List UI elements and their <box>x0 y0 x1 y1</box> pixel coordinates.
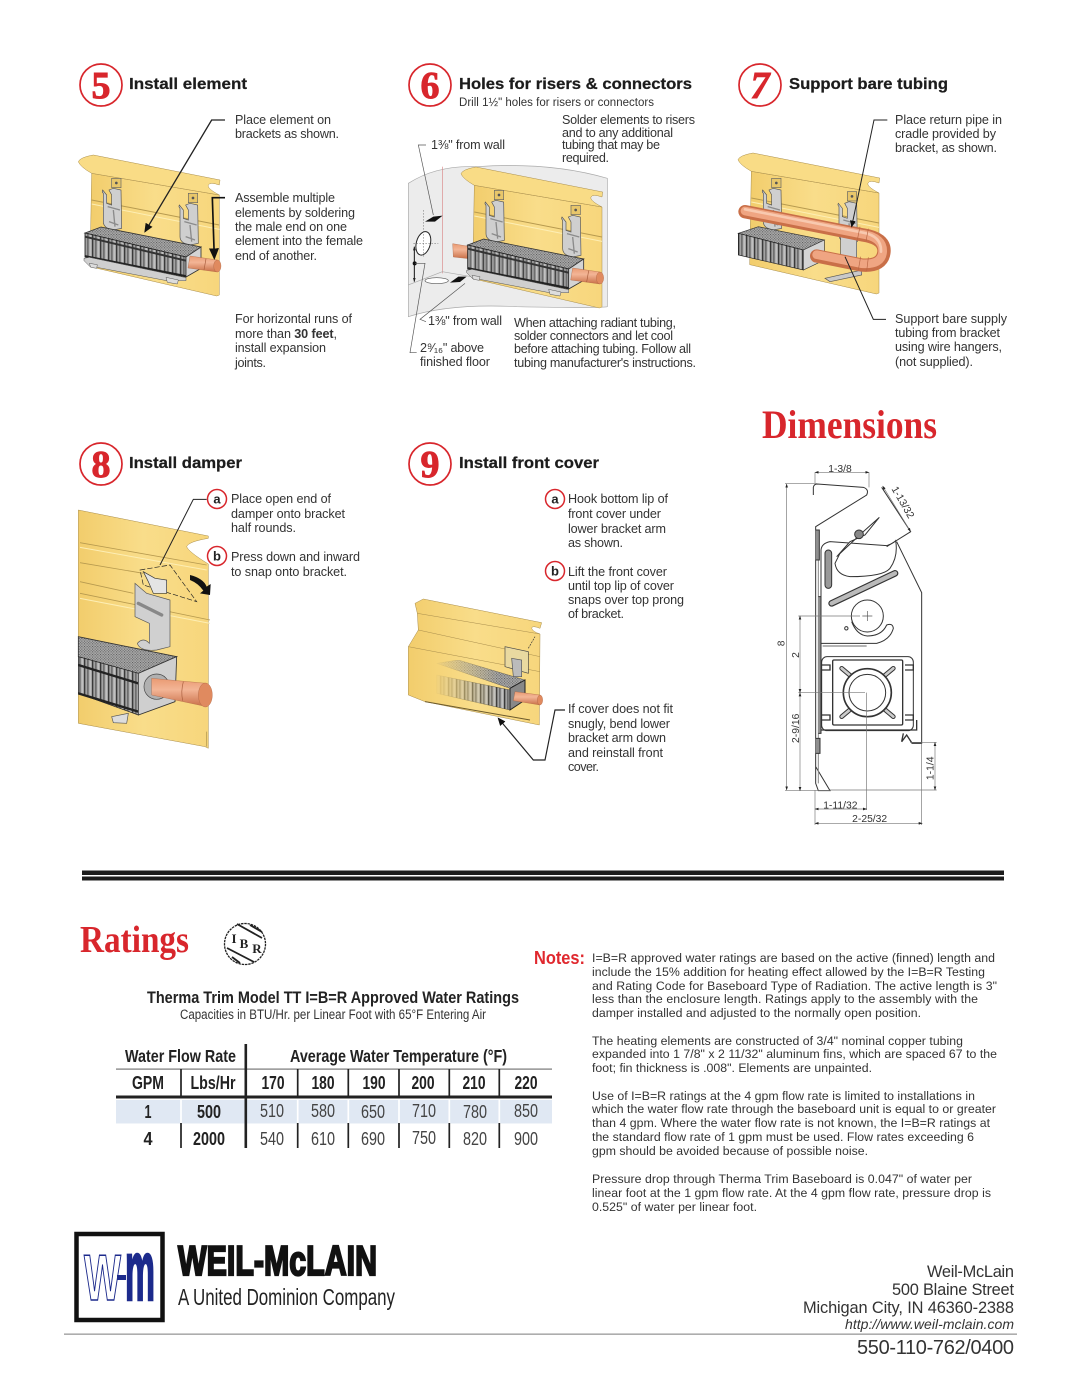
text: return pipe <box>895 113 1002 155</box>
heading: notes: Notes: <box>534 948 585 968</box>
text: address: Michigan City, IN 46360-2388 <box>803 1299 1014 1317</box>
text: notes paragraph 1: damper installed and adjusted to the normally open position. <box>592 1006 921 1020</box>
text: horizontal runs: more than 30 feet, <box>235 327 337 341</box>
text: if cover does not fit: snugly, bend lower <box>568 717 670 731</box>
text: horizontal runs: For horizontal runs of <box>235 312 352 326</box>
heading: install damper: Install damper <box>129 455 242 472</box>
text: press down <box>231 550 360 579</box>
dimension labels: 1-3/8 <box>828 464 852 475</box>
text: lift front cover <box>568 565 684 621</box>
text: notes paragraph 1: less than the enclosure length. Ratings apply to the assembly with the <box>592 992 978 1006</box>
text: supply tubing: (not supplied). <box>895 355 973 369</box>
dimension labels: 2-9/16 <box>791 713 802 743</box>
callout: b <box>546 562 564 580</box>
heading: holes for risers: Holes for risers & connectors <box>459 76 692 93</box>
text: notes paragraph 3: gpm should be avoided because of possible noise. <box>592 1144 868 1158</box>
text: notes paragraph 2: expanded into 1 7/8" x 2 11/32" aluminum fins, which are spaced 67 to the <box>592 1047 997 1061</box>
text: lift front cover: until top lip of cover <box>568 579 674 593</box>
badge: number 9: 9 <box>420 444 440 486</box>
text: lift front cover: snaps over top prong <box>568 593 684 607</box>
text: assemble elements <box>235 191 363 263</box>
badge: number 5 <box>80 64 122 107</box>
text: m <box>125 1224 155 1319</box>
label: from wall lower: 1⅜" from wall <box>428 314 502 328</box>
table: water ratings: 540 <box>260 1129 284 1149</box>
text: notes paragraph 1: include the 15% addition for heating effect allowed by the I=B=R Testing <box>592 965 985 979</box>
text: supply tubing: Support bare supply <box>895 312 1008 326</box>
illustration: front cover <box>408 599 565 760</box>
label: above finished floor: finished floor <box>420 355 490 369</box>
text: if cover does not fit: If cover does not fit <box>568 702 674 716</box>
table: water ratings: 820 <box>463 1129 487 1149</box>
badge: number 8: 8 <box>92 444 110 486</box>
text: place open end: damper onto bracket <box>231 507 346 521</box>
table: water ratings: 750 <box>412 1128 436 1148</box>
text: return pipe: cradle provided by <box>895 127 997 141</box>
badge: number 6: 6 <box>420 65 440 107</box>
panel: step 6 holes for risers and connectors <box>408 64 696 370</box>
callout: a: a <box>213 492 221 506</box>
divider: double rule <box>82 870 1004 880</box>
text: solder elements: required. <box>562 151 609 165</box>
table: water ratings: 610 <box>311 1129 335 1149</box>
table: water ratings: Water Flow Rate <box>125 1046 236 1066</box>
table: water ratings: 210 <box>462 1073 486 1093</box>
dimension labels: 1-1/4 <box>926 756 937 780</box>
table: water ratings: 510 <box>260 1101 284 1121</box>
text: solder elements: tubing that may be <box>562 138 660 152</box>
label: above finished floor: 2⁹⁄₁₆" above <box>420 341 484 355</box>
text: notes paragraph 4: 0.525" of water per linear foot. <box>592 1200 757 1214</box>
panel: step 8 install damper <box>78 443 360 748</box>
heading: install element: Install element <box>129 76 248 93</box>
dimension labels: 2 <box>791 652 802 658</box>
heading: ratings: Ratings <box>80 919 189 961</box>
text: place element <box>235 113 339 141</box>
table: water ratings: 1 <box>144 1102 152 1122</box>
label: above finished floor <box>420 341 490 369</box>
logo: Weil-McLain wordmark: WEIL-McLAIN <box>178 1237 377 1284</box>
text: if cover does not fit: bracket arm down <box>568 731 666 745</box>
badge: number 8 <box>80 443 122 486</box>
text: supply tubing: using wire hangers, <box>895 340 1002 354</box>
table: water ratings: 780 <box>463 1102 487 1122</box>
dimension lines <box>785 472 937 825</box>
divider: footer rule <box>64 1334 1017 1335</box>
heading: table title: Therma Trim Model TT I=B=R Approved Water Ratings <box>147 988 519 1007</box>
callout: b <box>208 546 226 566</box>
text: notes paragraph 3: Use of I=B=R ratings at the 4 gpm flow rate is limited to installations in <box>592 1089 975 1103</box>
table: water ratings: 710 <box>412 1101 436 1121</box>
text: notes paragraph 2 <box>592 1034 997 1075</box>
icon: IBR logo: I <box>231 931 237 946</box>
text: address: http://www.weil-mclain.com <box>845 1316 1014 1332</box>
table: water ratings <box>116 1044 552 1149</box>
text: address: Weil-McLain <box>927 1263 1014 1281</box>
text: assemble elements: end of another. <box>235 249 317 263</box>
text: notes paragraph 1: and Rating Code for Baseboard Type of Radiation. The active length is 3" <box>592 979 997 993</box>
table: water ratings: 170 <box>262 1073 284 1093</box>
logo: WM mark <box>76 1224 162 1320</box>
text: notes paragraph 1 <box>592 951 997 1020</box>
text: return pipe: Place return pipe in <box>895 113 1002 127</box>
panel: step 7 support bare tubing <box>738 64 1008 369</box>
callout: a <box>208 490 226 508</box>
panel: step 5 install element <box>78 64 363 370</box>
dimension labels: 8 <box>777 640 788 646</box>
table: water ratings: 900 <box>514 1129 538 1149</box>
text: place open end: half rounds. <box>231 521 296 535</box>
text: radiant tubing: tubing manufacturer's instructions. <box>514 356 696 370</box>
dimension labels: 1-13/32 <box>889 485 916 521</box>
subheading: capacities: Capacities in BTU/Hr. per Linear Foot with 65°F Entering Air <box>180 1007 486 1022</box>
text: solder elements: and to any additional <box>562 126 673 140</box>
heading: support bare tubing: Support bare tubing <box>789 76 948 93</box>
text: assemble elements: element into the female <box>235 234 363 248</box>
table: water ratings: 190 <box>362 1073 386 1093</box>
text: notes paragraph 2: foot; fin thickness is .008". Elements are unpainted. <box>592 1061 872 1075</box>
text: if cover does not fit: and reinstall front <box>568 746 664 760</box>
text: if cover does not fit: cover. <box>568 760 599 774</box>
text: radiant tubing: before attaching tubing. Follow all <box>514 342 691 356</box>
text: notes paragraph 1: I=B=R approved water ratings are based on the active (finned) length and <box>592 951 995 965</box>
text: notes paragraph 4: Pressure drop through Therma Trim Baseboard is 0.047" of water per <box>592 1172 972 1186</box>
text: address <box>803 1263 1014 1332</box>
icon: IBR logo: R <box>252 941 262 956</box>
text: place open end: Place open end of <box>231 492 332 506</box>
illustration: tubing on bracket <box>738 120 887 319</box>
label: from wall upper: 1⅜" from wall <box>431 138 505 152</box>
table: water ratings: 200 <box>412 1073 434 1093</box>
text: lift front cover: Lift the front cover <box>568 565 667 579</box>
text: radiant tubing: solder connectors and let cool <box>514 329 673 343</box>
text: if cover does not fit <box>568 702 674 774</box>
text: hook bottom lip: front cover under <box>568 507 661 521</box>
badge: number 7 <box>739 64 781 107</box>
text: horizontal runs: install expansion <box>235 341 326 355</box>
table: water ratings: Average Water Temperature (°F) <box>290 1046 507 1066</box>
text: return pipe: bracket, as shown. <box>895 141 997 155</box>
illustration: wall with holes and element <box>408 145 607 353</box>
panel: step 9 install front cover <box>408 443 684 774</box>
text: solder elements <box>562 113 695 165</box>
table: water ratings: 4 <box>144 1129 152 1149</box>
table: water ratings: 850 <box>514 1101 538 1121</box>
text: radiant tubing: When attaching radiant tubing, <box>514 316 676 330</box>
text: place element: Place element on <box>235 113 331 127</box>
text: place open end <box>231 492 346 535</box>
table: water ratings: 650 <box>361 1102 385 1122</box>
table: water ratings: 690 <box>361 1129 385 1149</box>
table: water ratings: 580 <box>311 1101 335 1121</box>
text: notes paragraph 3 <box>591 1089 996 1158</box>
heading: dimensions: Dimensions <box>762 402 937 447</box>
badge: number 7: 7 <box>750 65 772 107</box>
text: press down: Press down and inward <box>231 550 360 564</box>
text: notes paragraph 4: linear foot at the 1 gpm flow rate. At the 4 gpm flow rate, pressure drop is <box>592 1186 991 1200</box>
badge: number 6 <box>409 64 451 107</box>
text: notes paragraph 4 <box>592 1172 991 1214</box>
text: notes paragraph 3: than 4 gpm. Where the water flow rate is not known, the I=B=R ratings at <box>592 1116 991 1130</box>
text: radiant tubing <box>514 316 696 370</box>
callout: a: a <box>551 492 559 506</box>
text: horizontal runs: joints. <box>234 356 266 370</box>
illustration: element on brackets <box>78 120 225 296</box>
text: notes paragraph 3: the standard flow rate of 1 gpm must be used. Flow rates exceeding 6 <box>592 1130 974 1144</box>
text: hook bottom lip: as shown. <box>568 536 623 550</box>
illustration: damper on bracket <box>78 499 212 748</box>
table: water ratings: 2000 <box>193 1129 225 1149</box>
text: notes paragraph 3: which the water flow rate through the baseboard unit is equal to or greater <box>591 1102 996 1116</box>
dimension labels: 1-11/32 <box>823 801 858 812</box>
table: water ratings: Lbs/Hr <box>190 1073 236 1093</box>
text: hook bottom lip: lower bracket arm <box>568 522 666 536</box>
text: solder elements: Solder elements to risers <box>562 113 695 127</box>
text: lift front cover: of bracket. <box>568 607 624 621</box>
table: water ratings: 220 <box>514 1073 538 1093</box>
icon: IBR logo <box>224 924 266 964</box>
heading: install front cover: Install front cover <box>459 455 599 472</box>
text: notes paragraph 2: The heating elements are constructed of 3/4" nominal copper tubing <box>592 1034 963 1048</box>
text: united dominion company: A United Dominion Company <box>178 1284 395 1310</box>
text: assemble elements: the male end on one <box>235 220 347 234</box>
text: assemble elements: Assemble multiple <box>235 191 335 205</box>
badge: number 5: 5 <box>92 65 110 107</box>
table: water ratings: 180 <box>312 1073 334 1093</box>
text: address: 500 Blaine Street <box>892 1281 1014 1299</box>
diagram: dimensions cross section <box>777 464 937 825</box>
callout: a <box>546 490 564 508</box>
text: press down: to snap onto bracket. <box>231 565 347 579</box>
text: place element: brackets as shown. <box>235 127 339 141</box>
text: document number: 550-110-762/0400 <box>857 1337 1014 1359</box>
text: supply tubing: tubing from bracket <box>895 326 1000 340</box>
text: supply tubing <box>895 312 1008 369</box>
callout: b: b <box>213 548 221 564</box>
table: water ratings: 500 <box>197 1102 221 1122</box>
table: water ratings: GPM <box>132 1073 164 1093</box>
subheading: drill holes: Drill 1½" holes for risers or connectors <box>459 97 654 109</box>
icon: IBR logo: B <box>240 936 249 951</box>
text: hook bottom lip <box>568 492 668 550</box>
logo: WM mark: W <box>84 1241 121 1314</box>
badge: number 9 <box>409 443 451 486</box>
text: horizontal runs <box>234 312 352 370</box>
text: assemble elements: elements by soldering <box>235 206 355 220</box>
text: hook bottom lip: Hook bottom lip of <box>568 492 668 506</box>
dimension labels <box>777 464 937 825</box>
dimension labels: 2-25/32 <box>852 814 887 825</box>
callout: b: b <box>551 564 559 578</box>
